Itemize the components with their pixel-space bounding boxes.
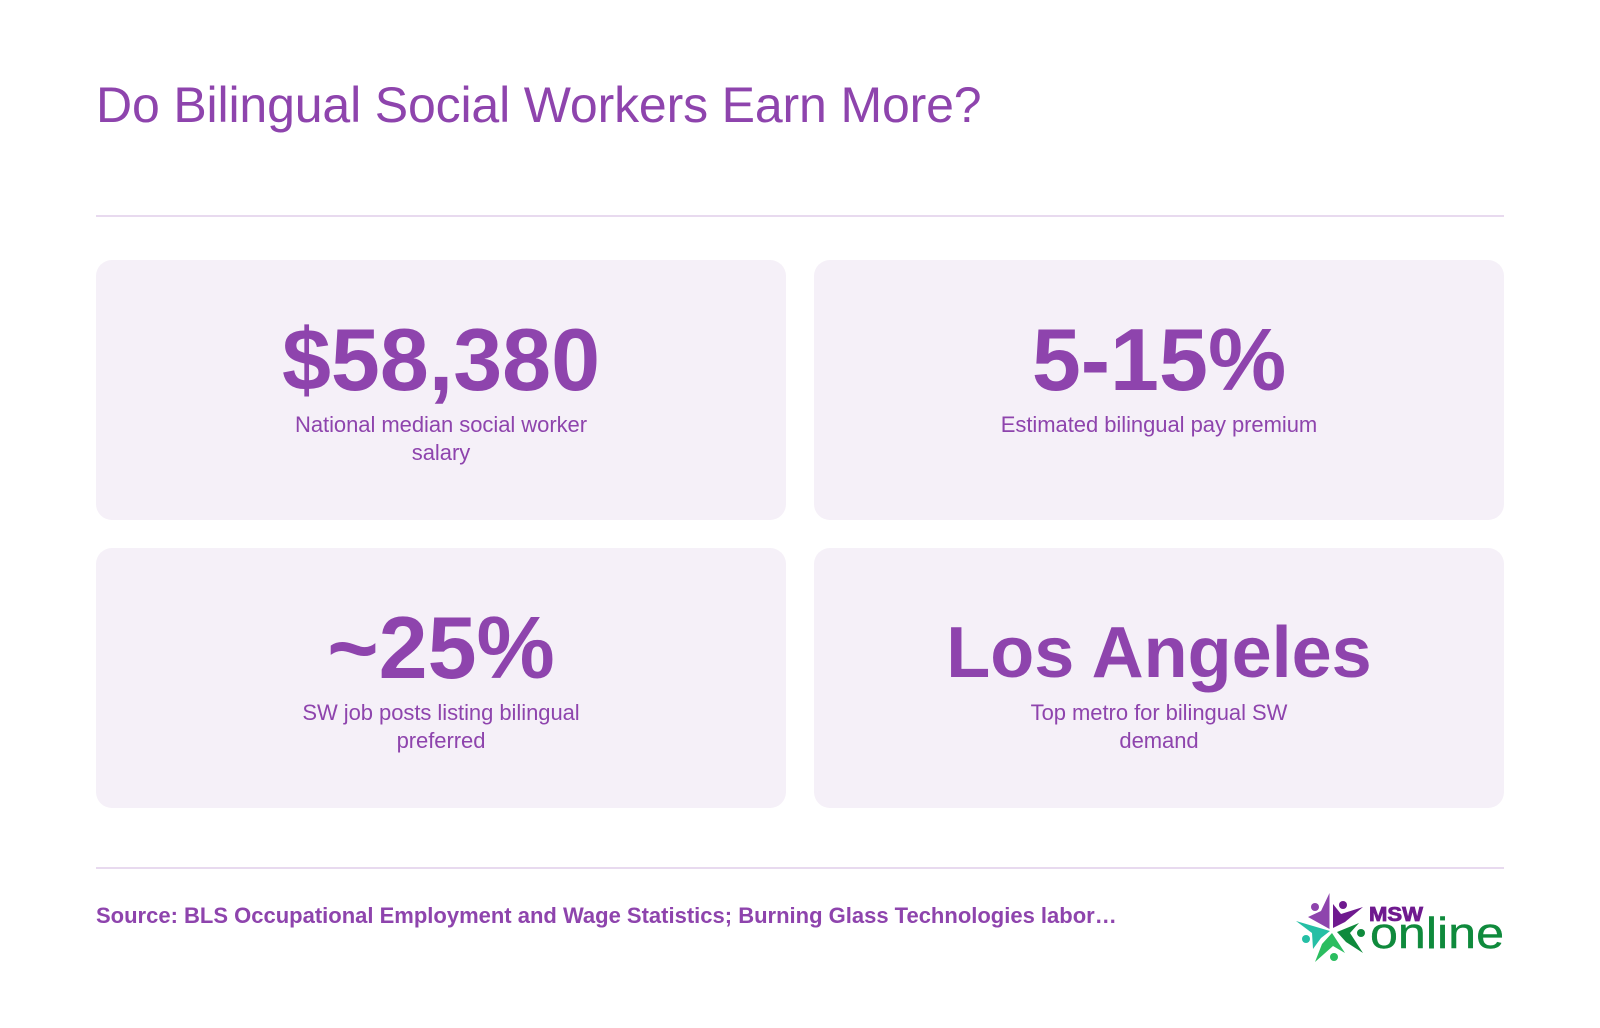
source note: Source: BLS Occupational Employment and Wage Statistics; Burning Glass Technologies labor… [96,903,1117,928]
panel: pay premium [814,260,1504,520]
panel: top metro [814,548,1504,808]
stat label: pay premium: Estimated bilingual pay premium [1001,412,1317,437]
stat value: median salary: $58,380 [282,310,600,409]
title: Do Bilingual Social Workers Earn More? [96,77,981,133]
icon: star of people [1296,893,1365,962]
stat label: median salary: National median social worker salary [295,412,587,465]
logo text: online: online [1370,909,1504,958]
panel: median salary [96,260,786,520]
stat value: job posts: ~25% [327,598,555,697]
panel: job posts [96,548,786,808]
stat label: job posts: SW job posts listing bilingual preferred [302,700,580,753]
logo: MSW Online [1296,893,1504,962]
logo text: MSW: MSW [1369,904,1423,926]
stat value: pay premium: 5-15% [1032,310,1286,409]
stat value: top metro: Los Angeles [946,613,1372,693]
stat label: top metro: Top metro for bilingual SW demand [1031,700,1287,753]
